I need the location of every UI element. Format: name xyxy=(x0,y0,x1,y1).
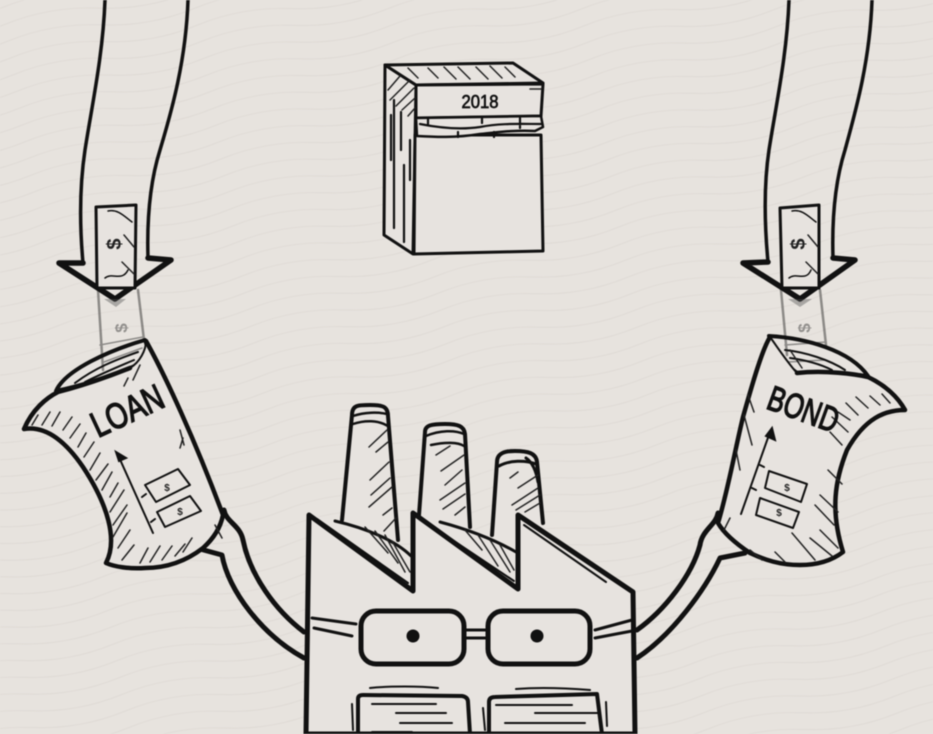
left falling bill, faded: $ xyxy=(112,323,131,333)
left money bill xyxy=(96,205,136,288)
chimney 2 xyxy=(419,424,471,540)
money icons xyxy=(145,469,201,527)
right money bill: $ xyxy=(788,238,810,250)
BOND bag xyxy=(718,336,905,565)
money icons: $ xyxy=(784,483,790,494)
chimney 3 xyxy=(492,451,543,545)
left arm xyxy=(200,510,304,658)
money icons: $ xyxy=(177,507,183,518)
left falling bill, faded xyxy=(98,290,144,370)
calendar xyxy=(384,63,543,254)
BOND label: BOND xyxy=(762,379,844,440)
book right xyxy=(483,688,607,734)
LOAN label: LOAN xyxy=(84,376,170,445)
right falling bill, faded xyxy=(781,290,826,362)
money icons xyxy=(756,471,807,528)
right arm xyxy=(637,513,745,658)
left eye xyxy=(406,630,420,642)
calendar year: 2018 xyxy=(462,92,498,112)
chimney 1 xyxy=(342,405,399,550)
right falling bill, faded: $ xyxy=(795,323,814,333)
growth arrow xyxy=(741,428,775,514)
money icons: $ xyxy=(164,483,170,494)
left arrow xyxy=(59,0,188,299)
right money bill xyxy=(780,205,819,288)
factory body xyxy=(306,513,635,734)
glasses xyxy=(312,611,632,664)
right eye xyxy=(530,630,544,642)
book left xyxy=(352,686,470,734)
money icons: $ xyxy=(776,508,782,519)
LOAN bag xyxy=(24,340,223,568)
right arrow xyxy=(743,0,872,299)
growth arrow xyxy=(116,452,155,533)
left money bill: $ xyxy=(104,238,126,250)
